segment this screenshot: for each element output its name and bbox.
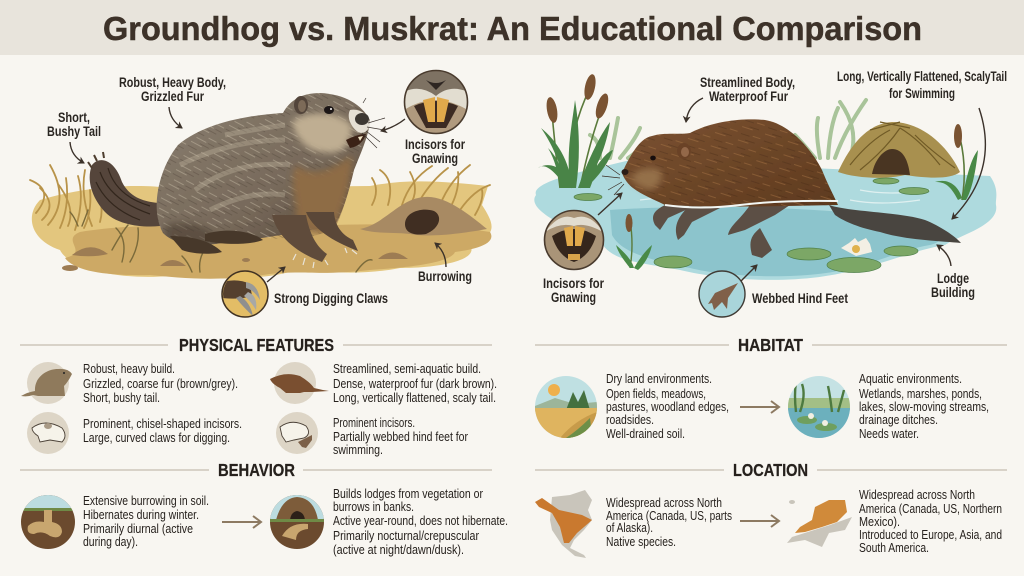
heading: behavior: BEHAVIOR bbox=[218, 460, 295, 480]
text: groundhog build: Robust, heavy build. bbox=[83, 362, 175, 376]
text: groundhog habitat: roadsides. bbox=[606, 413, 654, 427]
label: incisors: Incisors for bbox=[405, 137, 466, 152]
background reeds bbox=[590, 100, 866, 158]
map: eurasia bbox=[787, 500, 852, 547]
groundhog cheek and muzzle bbox=[292, 110, 370, 153]
heading: physical features: PHYSICAL FEATURES bbox=[179, 335, 334, 355]
label: streamlined body bbox=[686, 75, 795, 122]
water line bbox=[665, 201, 838, 208]
water lily bbox=[841, 238, 872, 256]
label: streamlined body: Waterproof Fur bbox=[709, 89, 789, 104]
text: groundhog location: Native species. bbox=[606, 535, 676, 549]
muskrat tail bbox=[829, 205, 961, 243]
small dirt mounds bbox=[62, 247, 408, 271]
label: lodge building: Lodge bbox=[937, 271, 969, 286]
text: muskrat behavior: Active year-round, does not hibernate. bbox=[333, 514, 508, 528]
text: muskrat habitat: drainage ditches. bbox=[859, 413, 938, 427]
panel: physical features bbox=[20, 335, 497, 457]
panel: habitat bbox=[535, 335, 1007, 441]
label: burrowing bbox=[418, 243, 472, 284]
text: muskrat location: South America. bbox=[859, 541, 929, 555]
map: north america bbox=[535, 490, 592, 558]
groundhog whiskers bbox=[362, 98, 385, 148]
label: robust body bbox=[119, 75, 226, 128]
cattails left bbox=[538, 73, 613, 188]
label: incisors: Gnawing bbox=[412, 151, 458, 166]
text: muskrat location: Widespread across North bbox=[859, 488, 975, 502]
cattails right bbox=[935, 124, 978, 200]
label: lodge building: Building bbox=[931, 285, 975, 300]
text: muskrat build: Streamlined, semi-aquatic build. bbox=[333, 362, 481, 376]
text: groundhog build bbox=[83, 362, 238, 405]
icon: muskrat skull and foot bbox=[276, 412, 318, 454]
text: muskrat habitat: Needs water. bbox=[859, 427, 919, 441]
panel: groundhog illustration bbox=[30, 70, 492, 317]
text: groundhog behavior bbox=[83, 494, 209, 549]
label: burrowing: Burrowing bbox=[418, 269, 472, 284]
label: short tail: Short, bbox=[58, 110, 90, 125]
text: groundhog behavior: during day). bbox=[83, 535, 138, 549]
label: streamlined body: Streamlined Body, bbox=[700, 75, 795, 90]
text: groundhog location bbox=[606, 496, 732, 549]
text: groundhog location: America (Canada, US, parts bbox=[606, 509, 732, 523]
icon: burrow cross-section bbox=[21, 495, 75, 549]
bushy tail bbox=[88, 152, 160, 226]
text: muskrat location bbox=[859, 488, 1002, 555]
title bar: Groundhog vs. Muskrat: An Educational Comparison bbox=[103, 10, 922, 47]
muskrat legs underwater bbox=[653, 205, 790, 258]
icon: muskrat bbox=[270, 362, 329, 404]
ground and dry grass bbox=[30, 165, 492, 279]
text: groundhog habitat: Open fields, meadows, bbox=[606, 387, 706, 401]
label: webbed feet: Webbed Hind Feet bbox=[752, 291, 848, 306]
text: muskrat location: Mexico). bbox=[859, 515, 900, 529]
text: muskrat build bbox=[333, 362, 497, 405]
text: muskrat behavior bbox=[333, 487, 508, 557]
heading: location: LOCATION bbox=[733, 460, 808, 480]
pond water bbox=[534, 160, 996, 280]
groundhog paws and legs bbox=[170, 212, 358, 268]
text: muskrat habitat: Aquatic environments. bbox=[859, 372, 962, 386]
label: tail: for Swimming bbox=[889, 86, 955, 101]
callout: digging claws bbox=[222, 267, 285, 317]
label: incisors: Incisors for bbox=[543, 276, 605, 291]
title bar bbox=[0, 0, 1024, 55]
callout: webbed foot bbox=[699, 265, 757, 317]
callout: groundhog incisors bbox=[381, 70, 468, 134]
lodge bbox=[838, 122, 960, 178]
label: short tail: Bushy Tail bbox=[47, 124, 101, 139]
text: muskrat behavior: (active at night/dawn/dusk). bbox=[333, 543, 464, 557]
panel: muskrat illustration bbox=[534, 69, 1007, 317]
text: muskrat behavior: burrows in banks. bbox=[333, 500, 414, 514]
icon: groundhog bbox=[21, 362, 72, 404]
heading: habitat: HABITAT bbox=[738, 335, 803, 355]
panel: behavior bbox=[20, 460, 508, 557]
text: muskrat teeth and feet bbox=[333, 416, 468, 457]
text: muskrat habitat: lakes, slow-moving streams, bbox=[859, 400, 989, 414]
icon: groundhog skull bbox=[27, 412, 69, 454]
label: robust body: Robust, Heavy Body, bbox=[119, 75, 226, 90]
icon: wetland scene bbox=[788, 376, 850, 438]
label: incisors: Gnawing bbox=[551, 290, 596, 305]
icon: dry field scene bbox=[535, 376, 597, 438]
lily pads bbox=[574, 178, 929, 272]
callout: muskrat incisors bbox=[544, 193, 622, 270]
text: groundhog behavior: Extensive burrowing in soil. bbox=[83, 494, 209, 508]
label: tail bbox=[837, 69, 1007, 219]
text: groundhog behavior: Hibernates during winter. bbox=[83, 508, 199, 522]
text: groundhog habitat: pastures, woodland edges, bbox=[606, 400, 729, 414]
text: muskrat teeth and feet: swimming. bbox=[333, 443, 383, 457]
label: claws: Strong Digging Claws bbox=[274, 291, 388, 306]
label: robust body: Grizzled Fur bbox=[141, 89, 205, 104]
text: groundhog behavior: Primarily diurnal (active bbox=[83, 522, 193, 536]
text: muskrat build: Dense, waterproof fur (dark brown). bbox=[333, 377, 497, 391]
label: short tail bbox=[47, 110, 101, 163]
muskrat body bbox=[602, 119, 838, 207]
label: lodge building bbox=[931, 245, 975, 300]
text: groundhog teeth and claws: Prominent, chisel-shaped incisors. bbox=[83, 417, 242, 431]
text: groundhog location: Widespread across North bbox=[606, 496, 722, 510]
text: groundhog habitat bbox=[606, 372, 729, 441]
groundhog body bbox=[156, 93, 370, 244]
text: muskrat behavior: Builds lodges from vegetation or bbox=[333, 487, 483, 501]
burrow mound bbox=[360, 197, 487, 235]
text: muskrat teeth and feet: Partially webbed hind feet for bbox=[333, 430, 468, 444]
arrow bbox=[740, 515, 779, 527]
text: muskrat habitat: Wetlands, marshes, ponds, bbox=[859, 387, 982, 401]
groundhog ear and eye bbox=[294, 96, 334, 114]
text: muskrat teeth and feet: Prominent incisors. bbox=[333, 416, 415, 430]
text: muskrat build: Long, vertically flattened, scaly tail. bbox=[333, 391, 496, 405]
arrow bbox=[222, 516, 261, 528]
text: groundhog teeth and claws: Large, curved claws for digging. bbox=[83, 431, 230, 445]
icon: lodge cross-section bbox=[270, 495, 324, 549]
arrow bbox=[740, 401, 779, 413]
text: groundhog build: Short, bushy tail. bbox=[83, 391, 160, 405]
text: muskrat habitat bbox=[859, 372, 989, 441]
label: incisors bbox=[543, 276, 605, 305]
text: groundhog teeth and claws bbox=[83, 417, 242, 445]
panel: location bbox=[535, 460, 1007, 558]
text: groundhog build: Grizzled, coarse fur (brown/grey). bbox=[83, 377, 238, 391]
label: incisors bbox=[405, 137, 466, 166]
text: groundhog location: of Alaska). bbox=[606, 521, 653, 535]
foreground cattail bbox=[616, 214, 652, 270]
text: groundhog habitat: Well-drained soil. bbox=[606, 427, 685, 441]
text: groundhog habitat: Dry land environments. bbox=[606, 372, 712, 386]
text: muskrat behavior: Primarily nocturnal/crepuscular bbox=[333, 529, 479, 543]
